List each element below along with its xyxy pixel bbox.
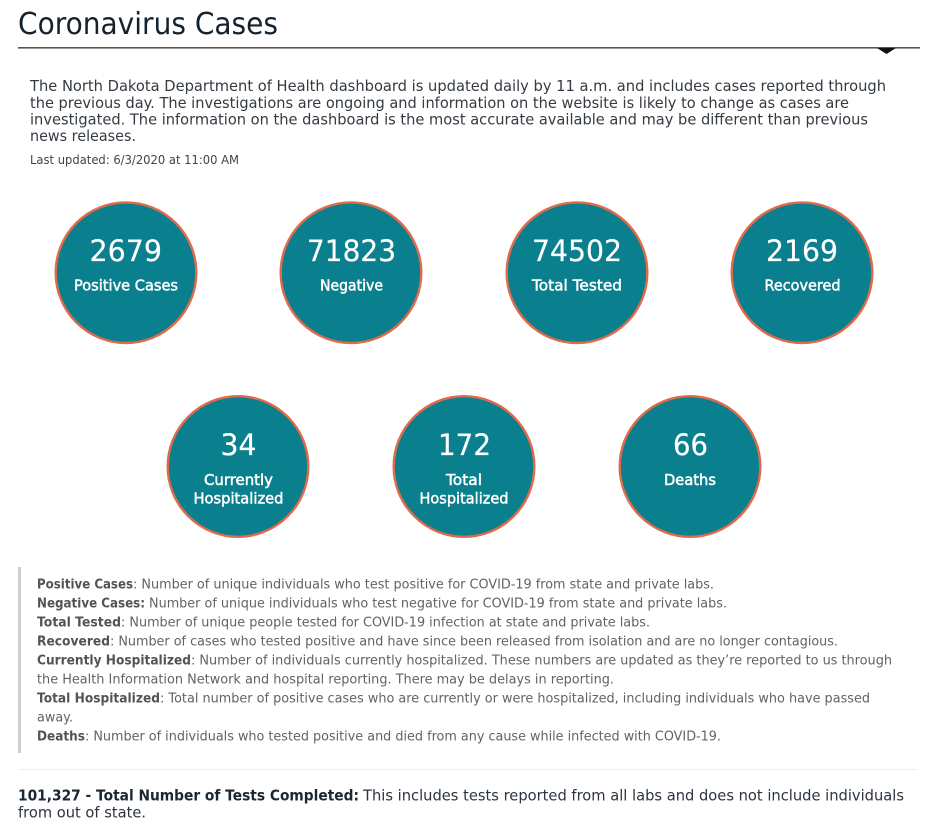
definition: total hospitalized: away.: [37, 709, 73, 725]
intro paragraph: The North Dakota Department of Health dashboard is updated daily by 11 a.m. and includes cases reported through: [29, 77, 886, 95]
definition: currently hospitalized: [37, 652, 892, 687]
stat: negative: [281, 202, 421, 343]
definition: total hospitalized: Total Hospitalized: [37, 690, 160, 706]
definition: total hospitalized: [37, 690, 870, 725]
stat: deaths: [620, 396, 760, 537]
stat: total hospitalized: Hospitalized: [420, 490, 508, 508]
stat: currently hospitalized: Hospitalized: [194, 490, 284, 508]
definition: deaths: : Number of individuals who tested positive and died from any cause while infected with COVID-19.: [85, 728, 721, 744]
stat: total hospitalized: Total: [445, 471, 482, 489]
intro paragraph: the previous day. The investigations are ongoing and information on the website is likely to change as cases are: [30, 94, 849, 112]
total tests note: This includes tests reported from all labs and does not include individuals: [362, 786, 904, 804]
definition: negative cases: Negative Cases:: [37, 595, 145, 611]
stat: negative: Negative: [320, 276, 383, 294]
stat: total tested: 74502: [532, 234, 622, 268]
stat: recovered: 2169: [766, 234, 838, 268]
definition: negative cases: Number of unique individuals who test negative for COVID-19 from state and private labs.: [149, 595, 727, 611]
stat: positive cases: Positive Cases: [74, 276, 178, 294]
last updated note: Last updated: 6/3/2020 at 11:00 AM: [30, 152, 239, 167]
definition: currently hospitalized: the Health Information Network and hospital reporting. There may be delays in reporting.: [37, 671, 614, 687]
stat: total tested: [507, 202, 647, 343]
stat: recovered: [732, 202, 872, 343]
definition: positive cases: : Number of unique individuals who test positive for COVID-19 from state and private labs.: [133, 576, 714, 592]
stat: currently hospitalized: [168, 396, 308, 537]
intro paragraph: [29, 77, 886, 145]
stat: currently hospitalized: Currently: [204, 471, 273, 489]
intro paragraph: news releases.: [30, 127, 136, 145]
stat: deaths: 66: [673, 428, 708, 462]
definition: recovered: Recovered: [37, 633, 110, 649]
stat: total hospitalized: [394, 396, 534, 537]
definition: recovered: : Number of cases who tested positive and have since been released from isolation and are no longer contagious.: [110, 633, 838, 649]
total tests note: 101,327 - Total Number of Tests Completed:: [18, 786, 359, 804]
stat: deaths: Deaths: [664, 471, 716, 489]
definition: positive cases: Positive Cases: [37, 576, 133, 592]
definition: currently hospitalized: Currently Hospitalized: [37, 652, 191, 668]
stat: total hospitalized: 172: [438, 428, 491, 462]
stat: currently hospitalized: 34: [220, 428, 256, 462]
definition: total hospitalized: : Total number of positive cases who are currently or were hospitalized, including individuals who have passed: [160, 690, 870, 706]
stat: negative: 71823: [307, 234, 396, 268]
total tests note: [18, 786, 904, 822]
stat: positive cases: [56, 202, 196, 343]
stat: total tested: Total Tested: [531, 276, 622, 294]
header rule with notch arrow: [18, 47, 920, 54]
stat: positive cases: 2679: [90, 234, 162, 268]
total tests note: from out of state.: [18, 804, 146, 822]
definitions panel: [18, 567, 892, 753]
definition: deaths: Deaths: [37, 728, 85, 744]
definition: total tested: : Number of unique people tested for COVID-19 infection at state and private labs.: [121, 614, 650, 630]
definition: total tested: Total Tested: [37, 614, 121, 630]
intro paragraph: investigated. The information on the dashboard is the most accurate available and may be different than previous: [30, 110, 868, 128]
stat: recovered: Recovered: [764, 276, 840, 294]
title: Coronavirus Cases: [18, 7, 278, 42]
definition: currently hospitalized: : Number of individuals currently hospitalized. These numbers are updated as they’re reported to us through: [191, 652, 892, 668]
